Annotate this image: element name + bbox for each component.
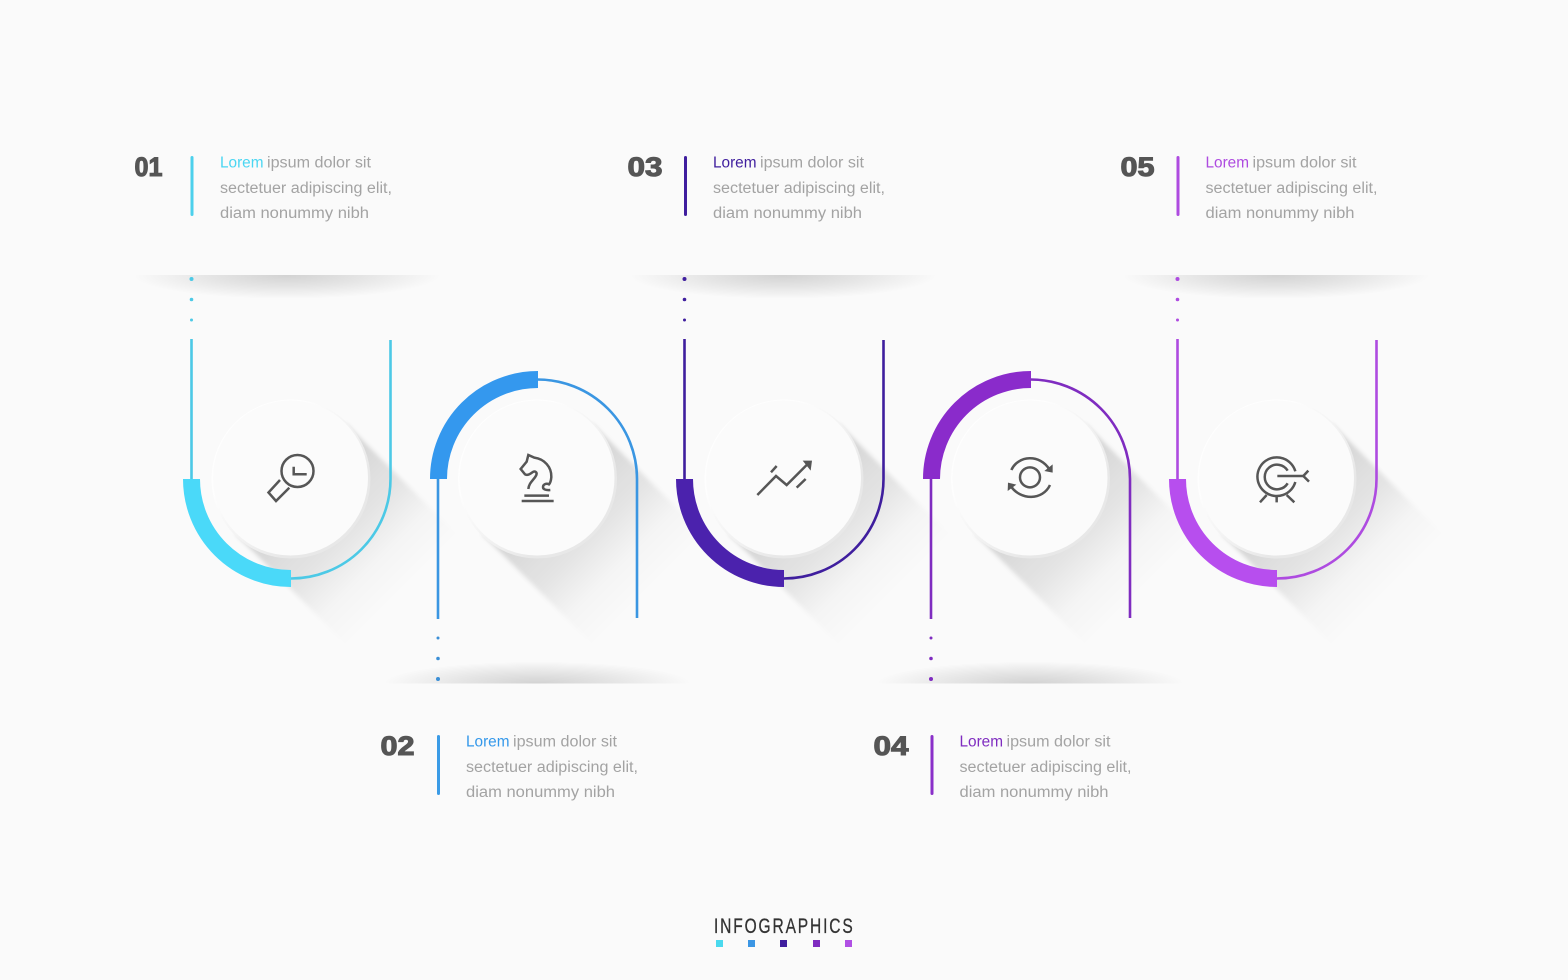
text block 02 bbox=[466, 734, 638, 801]
text block 03: diam nonummy nibh bbox=[713, 205, 862, 222]
thick arc 03 bbox=[684, 479, 784, 578]
long shadow 04 bbox=[975, 424, 1197, 646]
connector dots 05 bbox=[1176, 277, 1180, 322]
text block 03: Lorem bbox=[713, 154, 756, 172]
circle 02 bbox=[458, 400, 617, 558]
long shadow 02 bbox=[482, 424, 704, 646]
number 01: 01 bbox=[134, 152, 162, 182]
connector dots 02 bbox=[436, 636, 440, 681]
icon: sync arrows bbox=[1008, 458, 1053, 497]
text block 01: ipsum dolor sit bbox=[267, 154, 372, 172]
text block 05: ipsum dolor sit bbox=[1252, 154, 1357, 172]
text block 02: Lorem bbox=[466, 734, 510, 750]
text block 04: ipsum dolor sit bbox=[1006, 734, 1111, 750]
circle 01 bbox=[212, 400, 370, 558]
panel: step 02 bbox=[380, 380, 704, 801]
infographics wordmark: INFOGRAPHICS bbox=[714, 914, 853, 938]
panel: step 03 bbox=[628, 152, 951, 646]
connector dots 04 bbox=[929, 636, 933, 681]
text block 04: Lorem bbox=[960, 734, 1003, 750]
footer title bbox=[714, 914, 853, 947]
thin U line 01 bbox=[192, 339, 390, 578]
icon: target with arrow bbox=[1257, 457, 1309, 502]
long shadow 01 bbox=[236, 424, 458, 646]
text block 04 bbox=[960, 734, 1132, 801]
number 04: 04 bbox=[874, 731, 908, 761]
connector dots 01 bbox=[190, 277, 194, 322]
long shadow 05 bbox=[1222, 424, 1444, 646]
divider bar 02 bbox=[437, 735, 440, 795]
icon: magnifier clock bbox=[268, 455, 314, 501]
connector dots 03 bbox=[682, 277, 686, 322]
panel shadow 03 bbox=[660, 275, 906, 294]
text block 05: sectetuer adipiscing elit, bbox=[1206, 180, 1378, 197]
text block 02: ipsum dolor sit bbox=[513, 734, 618, 750]
thick arc 01 bbox=[192, 479, 291, 578]
panel shadow 02 bbox=[414, 666, 660, 684]
panel: step 01 bbox=[133, 152, 458, 646]
text block 04: sectetuer adipiscing elit, bbox=[960, 759, 1132, 776]
text block 01: sectetuer adipiscing elit, bbox=[220, 180, 392, 197]
divider bar 01 bbox=[190, 156, 194, 216]
text block 05 bbox=[1206, 154, 1378, 222]
panel shadow 05 bbox=[1153, 275, 1399, 294]
text block 05: Lorem bbox=[1206, 154, 1249, 172]
text block 02: sectetuer adipiscing elit, bbox=[466, 759, 638, 776]
circle 04 bbox=[951, 400, 1110, 558]
number 03: 03 bbox=[628, 152, 662, 182]
divider bar 03 bbox=[684, 156, 687, 216]
thick arc 04 bbox=[932, 380, 1031, 479]
text block 03 bbox=[713, 154, 885, 222]
panel shadow 04 bbox=[907, 666, 1153, 684]
thin arch line 04 bbox=[931, 380, 1130, 619]
text block 05: diam nonummy nibh bbox=[1206, 205, 1354, 222]
divider bar 04 bbox=[930, 735, 934, 795]
circle 03 bbox=[704, 400, 864, 558]
number 02: 02 bbox=[380, 731, 414, 761]
text block 01: diam nonummy nibh bbox=[220, 205, 369, 222]
thick arc 05 bbox=[1178, 479, 1277, 578]
colour legend squares bbox=[716, 940, 852, 947]
text block 03: sectetuer adipiscing elit, bbox=[713, 180, 885, 197]
text block 01: Lorem bbox=[220, 154, 264, 172]
panel: step 05 bbox=[1121, 156, 1408, 610]
divider bar 05 bbox=[1176, 156, 1180, 216]
icon: chess knight bbox=[521, 455, 554, 501]
thin U line 03 bbox=[684, 339, 884, 578]
text block 03: ipsum dolor sit bbox=[760, 154, 865, 172]
long shadow 03 bbox=[729, 424, 951, 646]
number 05: 05 bbox=[1120, 152, 1154, 182]
thin U line 05 bbox=[1178, 339, 1376, 578]
text block 02: diam nonummy nibh bbox=[466, 784, 615, 801]
thick arc 02 bbox=[438, 380, 538, 479]
text block 01 bbox=[220, 154, 392, 222]
circle 05 bbox=[1198, 400, 1356, 558]
thin arch line 02 bbox=[438, 380, 637, 619]
panel: step 04 bbox=[874, 380, 1197, 801]
panel shadow 01 bbox=[164, 275, 410, 294]
icon: rising trend arrow bbox=[757, 461, 812, 495]
text block 04: diam nonummy nibh bbox=[960, 784, 1108, 801]
